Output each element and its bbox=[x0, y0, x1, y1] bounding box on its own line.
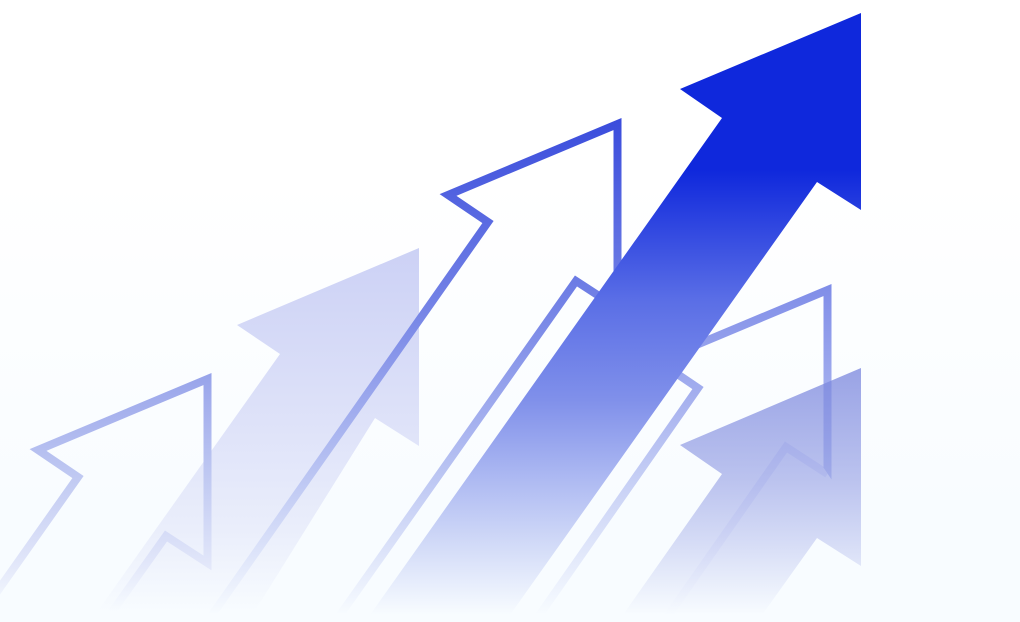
arrow: small outline, left bbox=[0, 379, 208, 622]
arrow: faint solid, back left bbox=[90, 248, 419, 622]
arrow: tall outline, centre bbox=[207, 124, 618, 622]
arrow: translucent solid, front right bbox=[618, 368, 861, 622]
arrow: outline, right bbox=[522, 290, 832, 622]
arrow: large solid blue bbox=[365, 13, 861, 622]
